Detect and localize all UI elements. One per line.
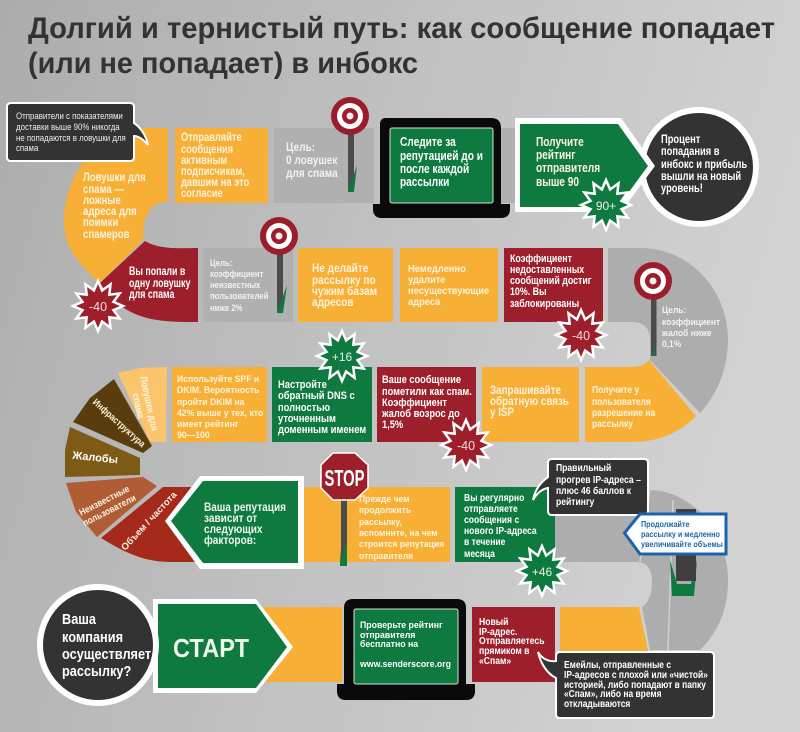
panel: goal 0 spam traps: 0 ловушек [286,154,338,167]
panel: send to active subscribers: согласие [181,188,223,200]
arrow: your reputation depends: факторов: [204,534,256,547]
panel: before continuing: Прежде чем [359,494,410,504]
panel: spam traps curve: поимки [83,216,118,229]
panel: marked as spam: 1,5% [382,419,403,431]
panel: delete nonexistent addresses: удалите [408,275,446,286]
panel: goal unknown users: Цель: [210,257,232,268]
icon: star +16: +16 [332,350,353,364]
arrow: get score above 90: Получите [536,136,584,149]
panel: goal 0 spam traps: для спама [286,167,338,180]
factor: infrastructure: Инфраструктура [91,396,148,449]
title: Долгий и тернистый путь: как сообщение попадает [28,12,775,45]
panel: request ISP feedback: обратную связь [490,395,569,408]
panel: upper grey curve: коэффициент [662,317,721,327]
panel: new IP regular sending: Вы регулярно [464,492,525,503]
panel: reverse DNS: обратный DNS с [278,389,355,402]
icon: star -40 complaints: -40 [457,439,475,453]
panel: do not use foreign lists: рассылку по [312,274,376,287]
panel: new IP to spam: IP-адрес. [479,627,517,637]
panel: bounce rate 10%: недоставленных [510,264,585,276]
panel: marked as spam: жалоб возрос до [381,407,460,420]
panel: spam traps curve: спамеров [83,228,130,241]
panel: do not use foreign lists: чужим базам [312,285,377,298]
factor: complaints: Жалобы [71,450,119,466]
panel: laptop senderscore: отправителя [360,630,415,640]
panel: SPF and DKIM: имеет рейтинг [177,419,239,429]
callout: delivery above 90%: спама [16,142,38,153]
panel: result circle: инбокс и прибыль [661,158,747,171]
panel: start question circle: Ваша [62,611,96,627]
factor: spam traps: Ловушки для [138,375,160,432]
panel: request ISP feedback: у ISP [490,406,514,419]
arrow: start [153,599,293,693]
panel: SPF and DKIM [172,367,267,442]
icon: target 3 [634,262,672,356]
icon: signpost grass [670,509,697,596]
callout: bad IP history: историей, либо попадают в папку [564,679,706,690]
panel: before continuing: отправителя [359,551,413,561]
callout: bad IP history: «Спам», либо на время [564,688,662,699]
panel: reverse DNS: полностью [278,402,330,414]
panel: obtain user permission: Получите у [592,384,640,395]
panel: laptop reputation: рассылки [400,176,449,189]
fan: reputation factors [65,367,200,562]
panel: send to active subscribers: активным [181,155,227,167]
panel: before continuing [304,487,450,562]
icon: target 2 [260,217,298,313]
callout: delivery above 90%: не попадаются в ловушки для [16,132,126,143]
sign: keep sending: Продолжайте [641,519,690,529]
icon: star -40 spam trap: -40 [89,300,107,314]
panel: result circle: попадания в [661,145,720,158]
panel: SPF and DKIM: Используйте SPF и [177,374,259,384]
panel: new IP regular sending: нового IP-адреса [464,525,537,536]
callout: bad IP history [538,652,714,718]
sign: keep sending: рассылку и медленно [641,529,720,539]
panel: lower grey curve [555,490,728,650]
icon: star +16 [317,331,367,381]
panel: delete nonexistent addresses: Немедленно [408,264,466,275]
panel: new IP regular sending [455,487,555,562]
panel: new IP to spam: «Спам» [479,656,511,666]
arrow: your reputation depends [165,476,304,569]
panel: orange segment lower right [560,607,650,660]
callout: warm-up: прогрев IP-адреса – [556,474,641,485]
panel: reverse DNS: доменным именем [278,424,366,436]
panel: goal unknown users: пользователей [210,290,268,301]
panel: upper grey curve [608,248,728,413]
sign: keep sending: увеличивайте объемы [641,539,723,549]
panel: marked as spam: пометили как спам. [382,386,472,398]
panel: send to active subscribers: давшим на это [181,177,249,189]
callout: warm-up [533,459,648,515]
panel: upper grey curve: жалоб ниже [661,328,712,338]
panel: new IP to spam: прямиком в [479,646,530,656]
arrow: your reputation depends: следующих [204,523,263,536]
panel: result circle [639,107,759,227]
panel: goal unknown users: коэффициент [210,268,264,279]
factor: unknown users: Неизвестные [77,483,131,518]
panel: caught in a spam trap: для спама [129,289,175,301]
panel: delete nonexistent addresses: адреса [408,297,441,308]
arrow: your reputation depends: Ваша репутация [204,501,286,514]
icon: target 1 [331,97,369,192]
panel: laptop senderscore: www.senderscore.org [359,659,451,669]
panel: reverse DNS: уточненным [278,413,336,425]
panel: goal 0 spam traps [274,128,374,203]
factor: volume and frequency [101,487,200,562]
icon: stop sign: STOP [324,465,364,491]
panel: spam traps curve: Ловушки для [83,171,146,184]
panel: laptop senderscore: бесплатно на [360,639,419,649]
panel: new IP regular sending: месяца [464,548,496,559]
panel: send to active subscribers [175,128,268,203]
strip behind laptop [500,128,515,203]
factor: unknown users [66,477,157,537]
panel: obtain user permission: рассылку [592,418,634,429]
panel: upper grey curve: 0,1% [662,339,681,349]
panel: before continuing: рассылку, [359,517,402,527]
panel: goal 0 spam traps: Цель: [286,141,315,154]
panel: caught in a spam trap [100,241,198,322]
icon: star +46 [517,546,567,596]
panel: spam traps curve [64,128,168,283]
panel: new IP regular sending: сообщения с [464,514,519,525]
panel: marked as spam [377,367,476,442]
factor: spam traps: спама [130,392,146,420]
panel: request ISP feedback: Запрашивайте [490,384,561,397]
icon: star 90+: 90+ [596,199,616,213]
panel: bounce rate 10% [504,248,603,322]
callout: delivery above 90%: Отправители с показателями [16,110,123,121]
arrow: get score above 90 [515,118,655,212]
panel: before continuing: продолжить [359,505,411,515]
panel: bounce rate 10%: заблокированы [510,298,579,310]
panel: bounce rate 10%: сообщений достиг [510,275,591,287]
panel: before continuing: вспомните, на чем [359,528,438,538]
panel: marked as spam: Ваше сообщение [382,373,461,386]
panel: spam traps curve: спама — [83,183,124,196]
callout: warm-up: Правильный [556,462,612,473]
panel: laptop reputation: после каждой [400,163,469,176]
panel: marked as spam: Коэффициент [382,396,447,409]
panel: spam traps curve: ложные [83,194,121,207]
factor: volume and frequency: Объем / частота [119,489,180,553]
panel: start question circle [37,584,159,706]
factor: unknown users: пользователи [81,492,138,528]
panel: reverse DNS [272,367,372,442]
panel: before continuing: строится репутация [359,539,444,549]
panel: laptop reputation [373,118,510,218]
arrow: get score above 90: выше 90 [536,176,579,189]
panel: laptop senderscore [337,599,475,700]
callout: delivery above 90%: доставки выше 90% никогда [16,121,120,132]
panel: goal unknown users: неизвестных [210,279,260,290]
panel: goal unknown users: ниже 2% [210,302,243,313]
arrow: your reputation depends: зависит от [204,512,258,525]
factor: spam traps [118,367,167,442]
panel: bounce rate 10%: Коэффициент [510,253,572,265]
panel: new IP to spam: Отправляетесь [479,636,545,646]
panel: bounce rate 10%: 10%. Вы [510,286,547,298]
icon: star -40 blocked [556,310,606,360]
panel: caught in a spam trap: Вы попали в [129,266,185,278]
callout: bad IP history: IP-адресов с плохой или «чистой» [564,669,708,680]
panel: new IP to spam: Новый [479,617,509,627]
panel: start question circle: компания [62,629,123,645]
panel: do not use foreign lists: Не делайте [312,262,368,275]
panel: new IP regular sending: в течение [464,536,505,547]
panel: obtain user permission [585,360,696,442]
title: (или не попадает) в инбокс [28,47,418,80]
callout: warm-up: рейтингу [556,496,595,507]
factor: complaints [65,427,140,477]
icon: star +46: +46 [532,565,553,579]
icon: star -40 complaints [441,420,491,470]
panel: start question circle: осуществляет [62,646,151,662]
callout: delivery above 90% [7,103,148,161]
factor: infrastructure [73,379,152,453]
panel: send to active subscribers: Отправляйте [181,132,242,144]
panel: result circle: Процент [661,133,700,146]
callout: bad IP history: откладываются [564,698,630,709]
panel: orange connector start [262,607,342,682]
icon: star -40 blocked: -40 [572,329,590,343]
panel: SPF and DKIM: пройти DKIM на [177,397,245,407]
panel: send to active subscribers: сообщения [181,143,233,156]
panel: SPF and DKIM: 90—100 [177,430,210,440]
callout: warm-up: плюс 46 баллов к [556,485,631,496]
panel: new IP to spam [472,607,555,682]
panel: result circle: вышли на новый [661,170,741,183]
panel: new IP regular sending: отправляете [464,503,518,514]
panel: laptop senderscore: Проверьте рейтинг [360,620,443,630]
panel: start question circle: рассылку? [62,663,131,679]
icon: stop sign [321,453,368,566]
arrow: get score above 90: рейтинг [536,149,576,162]
panel: obtain user permission: пользователя [592,396,651,407]
panel: do not use foreign lists: адресов [312,296,354,309]
panel: SPF and DKIM: DKIM. Вероятность [177,385,260,395]
panel: upper grey curve: Цель: [662,305,686,315]
panel: goal unknown users [203,248,293,322]
panel: obtain user permission: разрешение на [592,407,656,418]
panel: spam traps curve: адреса для [83,205,137,218]
sign: keep sending [624,514,726,554]
arrow: get score above 90: отправителя [536,162,600,175]
panel: caught in a spam trap: одну ловушку [129,278,191,290]
panel: reverse DNS: Настройте [278,379,327,391]
title [28,12,775,80]
panel: delete nonexistent addresses: несуществующие [408,286,490,297]
panel: delete nonexistent addresses [400,248,498,322]
arrow: start: СТАРТ [173,633,249,663]
panel: send to active subscribers: подписчикам, [181,166,245,178]
icon: star 90+ [581,180,631,230]
panel: result circle: уровень! [661,182,703,195]
icon: star -40 spam trap [73,281,123,331]
panel: laptop reputation: Следите за [400,136,456,149]
callout: bad IP history: Емейлы, отправленные с [564,659,671,670]
panel: request ISP feedback [482,367,579,442]
panel: do not use foreign lists [298,248,393,322]
panel: laptop reputation: репутацией до и [400,150,483,163]
panel: SPF and DKIM: 42% выше у тех, кто [177,408,264,418]
